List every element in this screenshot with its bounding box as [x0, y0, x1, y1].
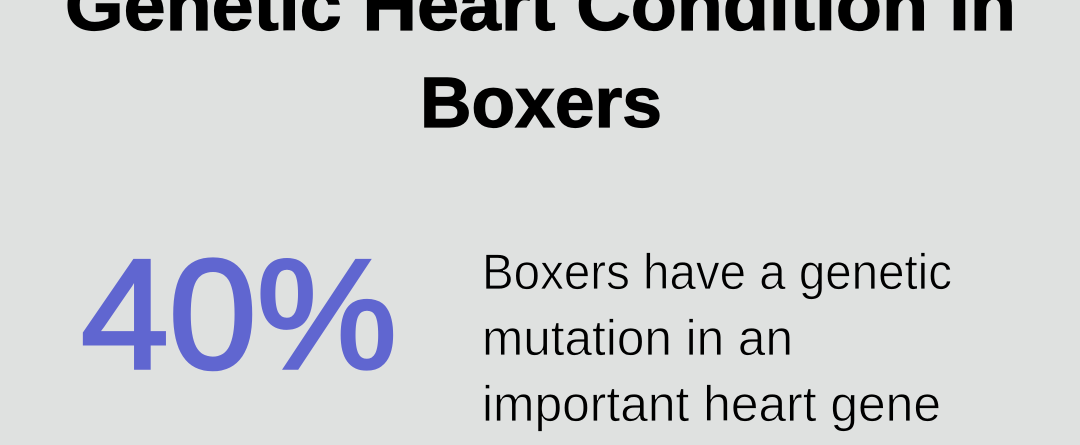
statistic: 40%: 40%	[81, 228, 397, 402]
title	[65, 0, 1016, 143]
description text: mutation in an	[482, 310, 793, 366]
title: Boxers	[420, 64, 662, 143]
description text: important heart gene	[482, 376, 941, 432]
description text	[482, 244, 952, 432]
description text: Boxers have a genetic	[482, 244, 952, 300]
